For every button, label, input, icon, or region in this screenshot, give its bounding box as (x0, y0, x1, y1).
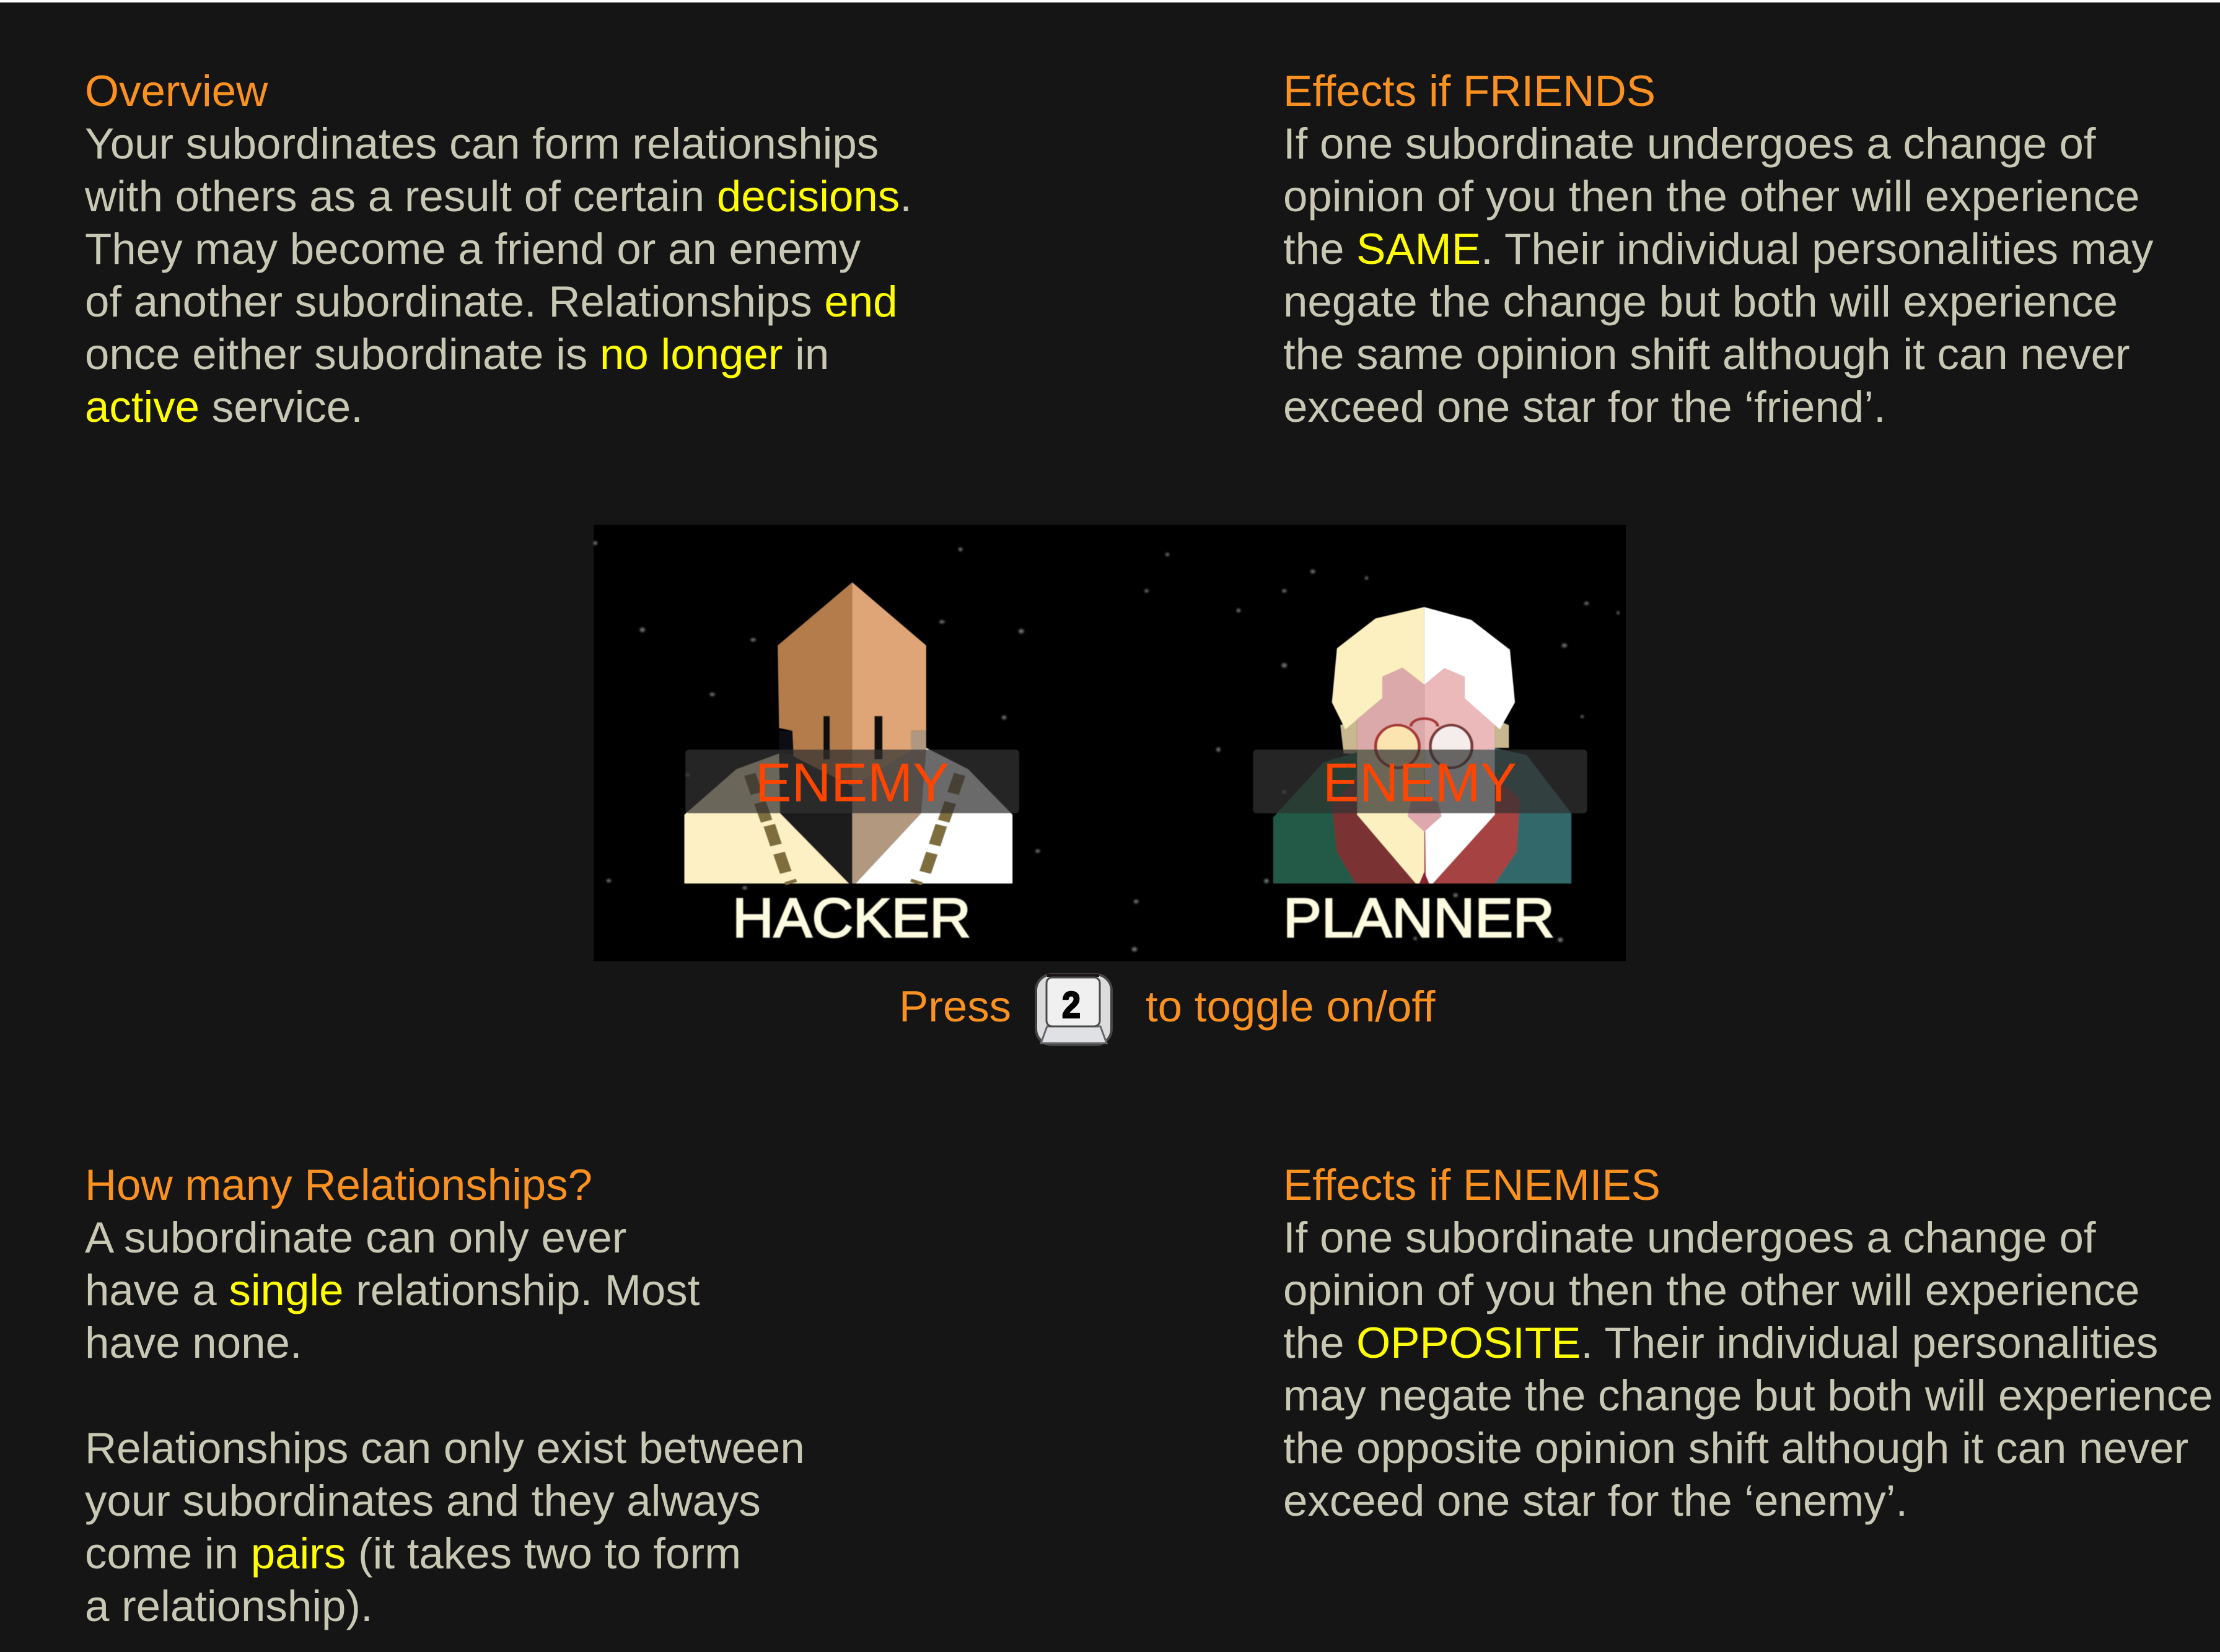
text block: friends body: opinion of you then the other will experience (1283, 172, 2139, 221)
text block: how many body: have a single relationship. Most (85, 1266, 700, 1315)
text block: enemies body: If one subordinate undergoes a change of (1283, 1213, 2096, 1262)
text block: how many body: a relationship). (85, 1582, 373, 1631)
text block: overview body: active service. (85, 383, 363, 432)
name: hacker: HACKER (732, 887, 971, 949)
text block: friends body: the same opinion shift although it can never (1283, 330, 2130, 379)
panel: overview (84, 67, 912, 432)
text block: how many body: A subordinate can only ever (85, 1213, 626, 1262)
text block: how many body: Relationships can only exist between (85, 1424, 805, 1473)
text block: friends body (1283, 120, 2154, 432)
text block: overview body: with others as a result of certain decisions. (84, 172, 912, 221)
text block: overview body: Your subordinates can form relationships (85, 120, 879, 168)
text block: how many body (85, 1213, 805, 1631)
text block: enemies body (1283, 1213, 2213, 1526)
panel: effects if enemies (1283, 1161, 2213, 1526)
toggle instruction (899, 974, 1436, 1045)
text block: overview body (84, 120, 912, 432)
text block: overview body: of another subordinate. Relationships end (85, 278, 898, 326)
heading: how many relationships: How many Relationships? (85, 1161, 592, 1210)
text: to toggle on/off: to toggle on/off (1146, 982, 1436, 1031)
text block: how many body: have none. (85, 1319, 302, 1368)
panel: how many relationships (85, 1161, 805, 1631)
label plate: planner (1253, 750, 1587, 813)
label: hacker enemy: ENEMY (755, 752, 949, 813)
panel: effects if friends (1283, 67, 2154, 432)
panel: game screenshot (594, 525, 1626, 961)
text block: enemies body: exceed one star for the ‘enemy’. (1283, 1477, 1908, 1526)
text block: friends body: negate the change but both will experience (1283, 278, 2118, 326)
text block: how many body: your subordinates and they always (85, 1477, 761, 1526)
portrait: planner (1253, 607, 1587, 883)
text block: overview body: They may become a friend or an enemy (85, 225, 861, 274)
stars background (594, 541, 1620, 951)
text block: friends body: exceed one star for the ‘friend’. (1283, 383, 1886, 432)
portrait: hacker (684, 582, 1019, 883)
label: planner enemy: ENEMY (1323, 752, 1517, 813)
heading: overview: Overview (85, 67, 268, 116)
label plate: hacker (685, 750, 1019, 813)
text block: enemies body: may negate the change but both will experience (1283, 1371, 2213, 1420)
text block: friends body: the SAME. Their individual personalities may (1283, 225, 2154, 274)
text block: how many body: come in pairs (it takes two to form (85, 1529, 741, 1578)
name: planner: PLANNER (1283, 887, 1555, 949)
heading: effects if friends: Effects if FRIENDS (1283, 67, 1656, 116)
text: press: Press (899, 982, 1011, 1031)
icon: key 2 (1036, 974, 1112, 1045)
text block: overview body: once either subordinate is no longer in (85, 330, 829, 379)
heading: effects if enemies: Effects if ENEMIES (1283, 1161, 1661, 1210)
text block: enemies body: opinion of you then the other will experience (1283, 1266, 2139, 1315)
text block: enemies body: the opposite opinion shift although it can never (1283, 1424, 2188, 1473)
icon: key 2: 2 (1062, 984, 1081, 1026)
text block: enemies body: the OPPOSITE. Their individual personalities (1283, 1319, 2158, 1368)
text block: friends body: If one subordinate undergoes a change of (1283, 120, 2096, 168)
